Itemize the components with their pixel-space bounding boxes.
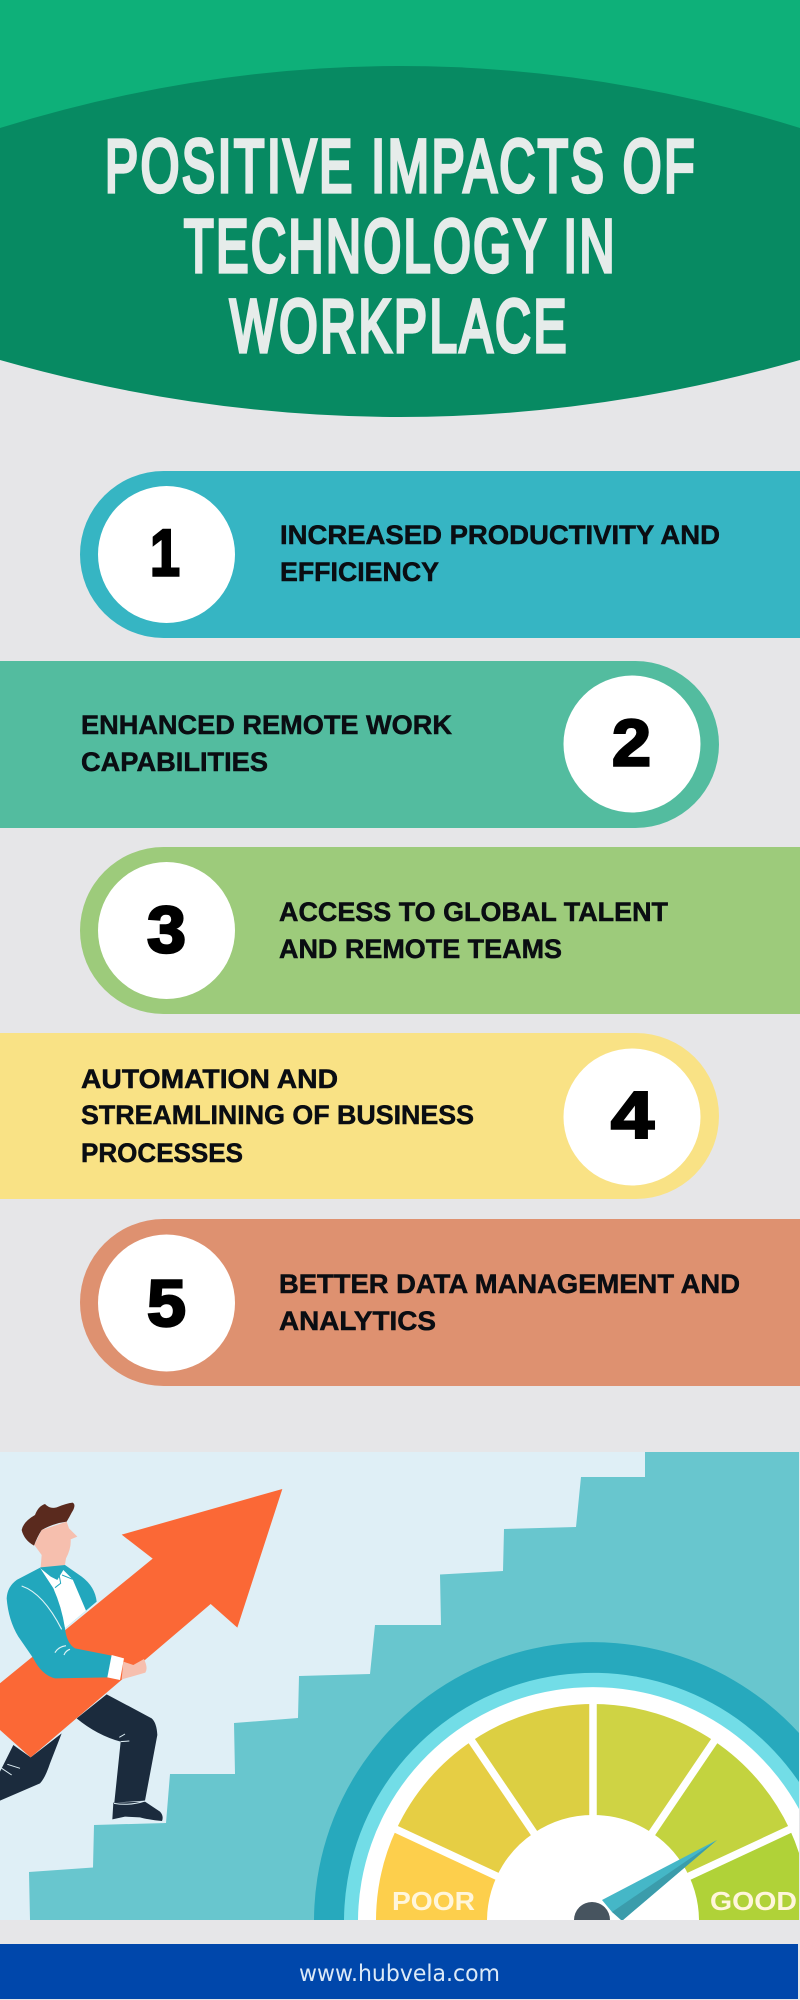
panel: item 4 — [0, 1033, 719, 1199]
illustration panel — [0, 1452, 799, 1920]
head — [34, 1522, 78, 1568]
footer bar — [0, 1944, 798, 1999]
panel: item 5: BETTER DATA MANAGEMENT AND — [279, 1269, 740, 1299]
panel: item 2: ENHANCED REMOTE WORK — [81, 710, 452, 740]
big arrow — [0, 1489, 282, 1757]
panel: item 1: EFFICIENCY — [280, 557, 439, 587]
panel: item 1: INCREASED PRODUCTIVITY AND — [280, 520, 720, 550]
panel: item 5: 5 — [147, 1266, 186, 1340]
gauge needle — [568, 1840, 717, 1920]
title — [105, 124, 697, 368]
panel: item 3: AND REMOTE TEAMS — [279, 934, 562, 964]
panel: item 4: 4 — [611, 1078, 654, 1152]
shoe — [112, 1802, 163, 1821]
panel: item 2 — [0, 661, 719, 828]
panel: item 1 — [80, 471, 800, 638]
panel: item 4: AUTOMATION AND — [81, 1064, 338, 1094]
gauge: POOR — [392, 1886, 475, 1916]
panel: item 5: ANALYTICS — [279, 1306, 436, 1336]
gauge: GOOD — [710, 1886, 797, 1916]
website url: www.hubvela.com — [299, 1961, 500, 1987]
panel: item 1: 1 — [150, 516, 180, 590]
hair — [22, 1503, 74, 1546]
panel: item 2: 2 — [612, 706, 651, 780]
panel: item 4: STREAMLINING OF BUSINESS — [81, 1100, 474, 1130]
panel: item 3: ACCESS TO GLOBAL TALENT — [279, 897, 668, 927]
panel: item 5 — [80, 1219, 800, 1386]
title: WORKPLACE — [230, 284, 569, 368]
person carrying arrow — [0, 1489, 282, 1821]
legs — [0, 1694, 157, 1803]
shirt — [40, 1568, 86, 1628]
header banner — [0, 0, 800, 417]
stairs — [29, 1452, 799, 1920]
gauge — [314, 1642, 799, 1920]
cuff and hand — [107, 1655, 124, 1680]
panel: item 3 — [80, 847, 800, 1014]
panel: item 3: 3 — [147, 892, 186, 966]
torso jacket — [17, 1565, 97, 1630]
panel: item 2: CAPABILITIES — [81, 747, 268, 777]
arm — [7, 1568, 112, 1678]
panel: item 4: PROCESSES — [81, 1138, 243, 1168]
